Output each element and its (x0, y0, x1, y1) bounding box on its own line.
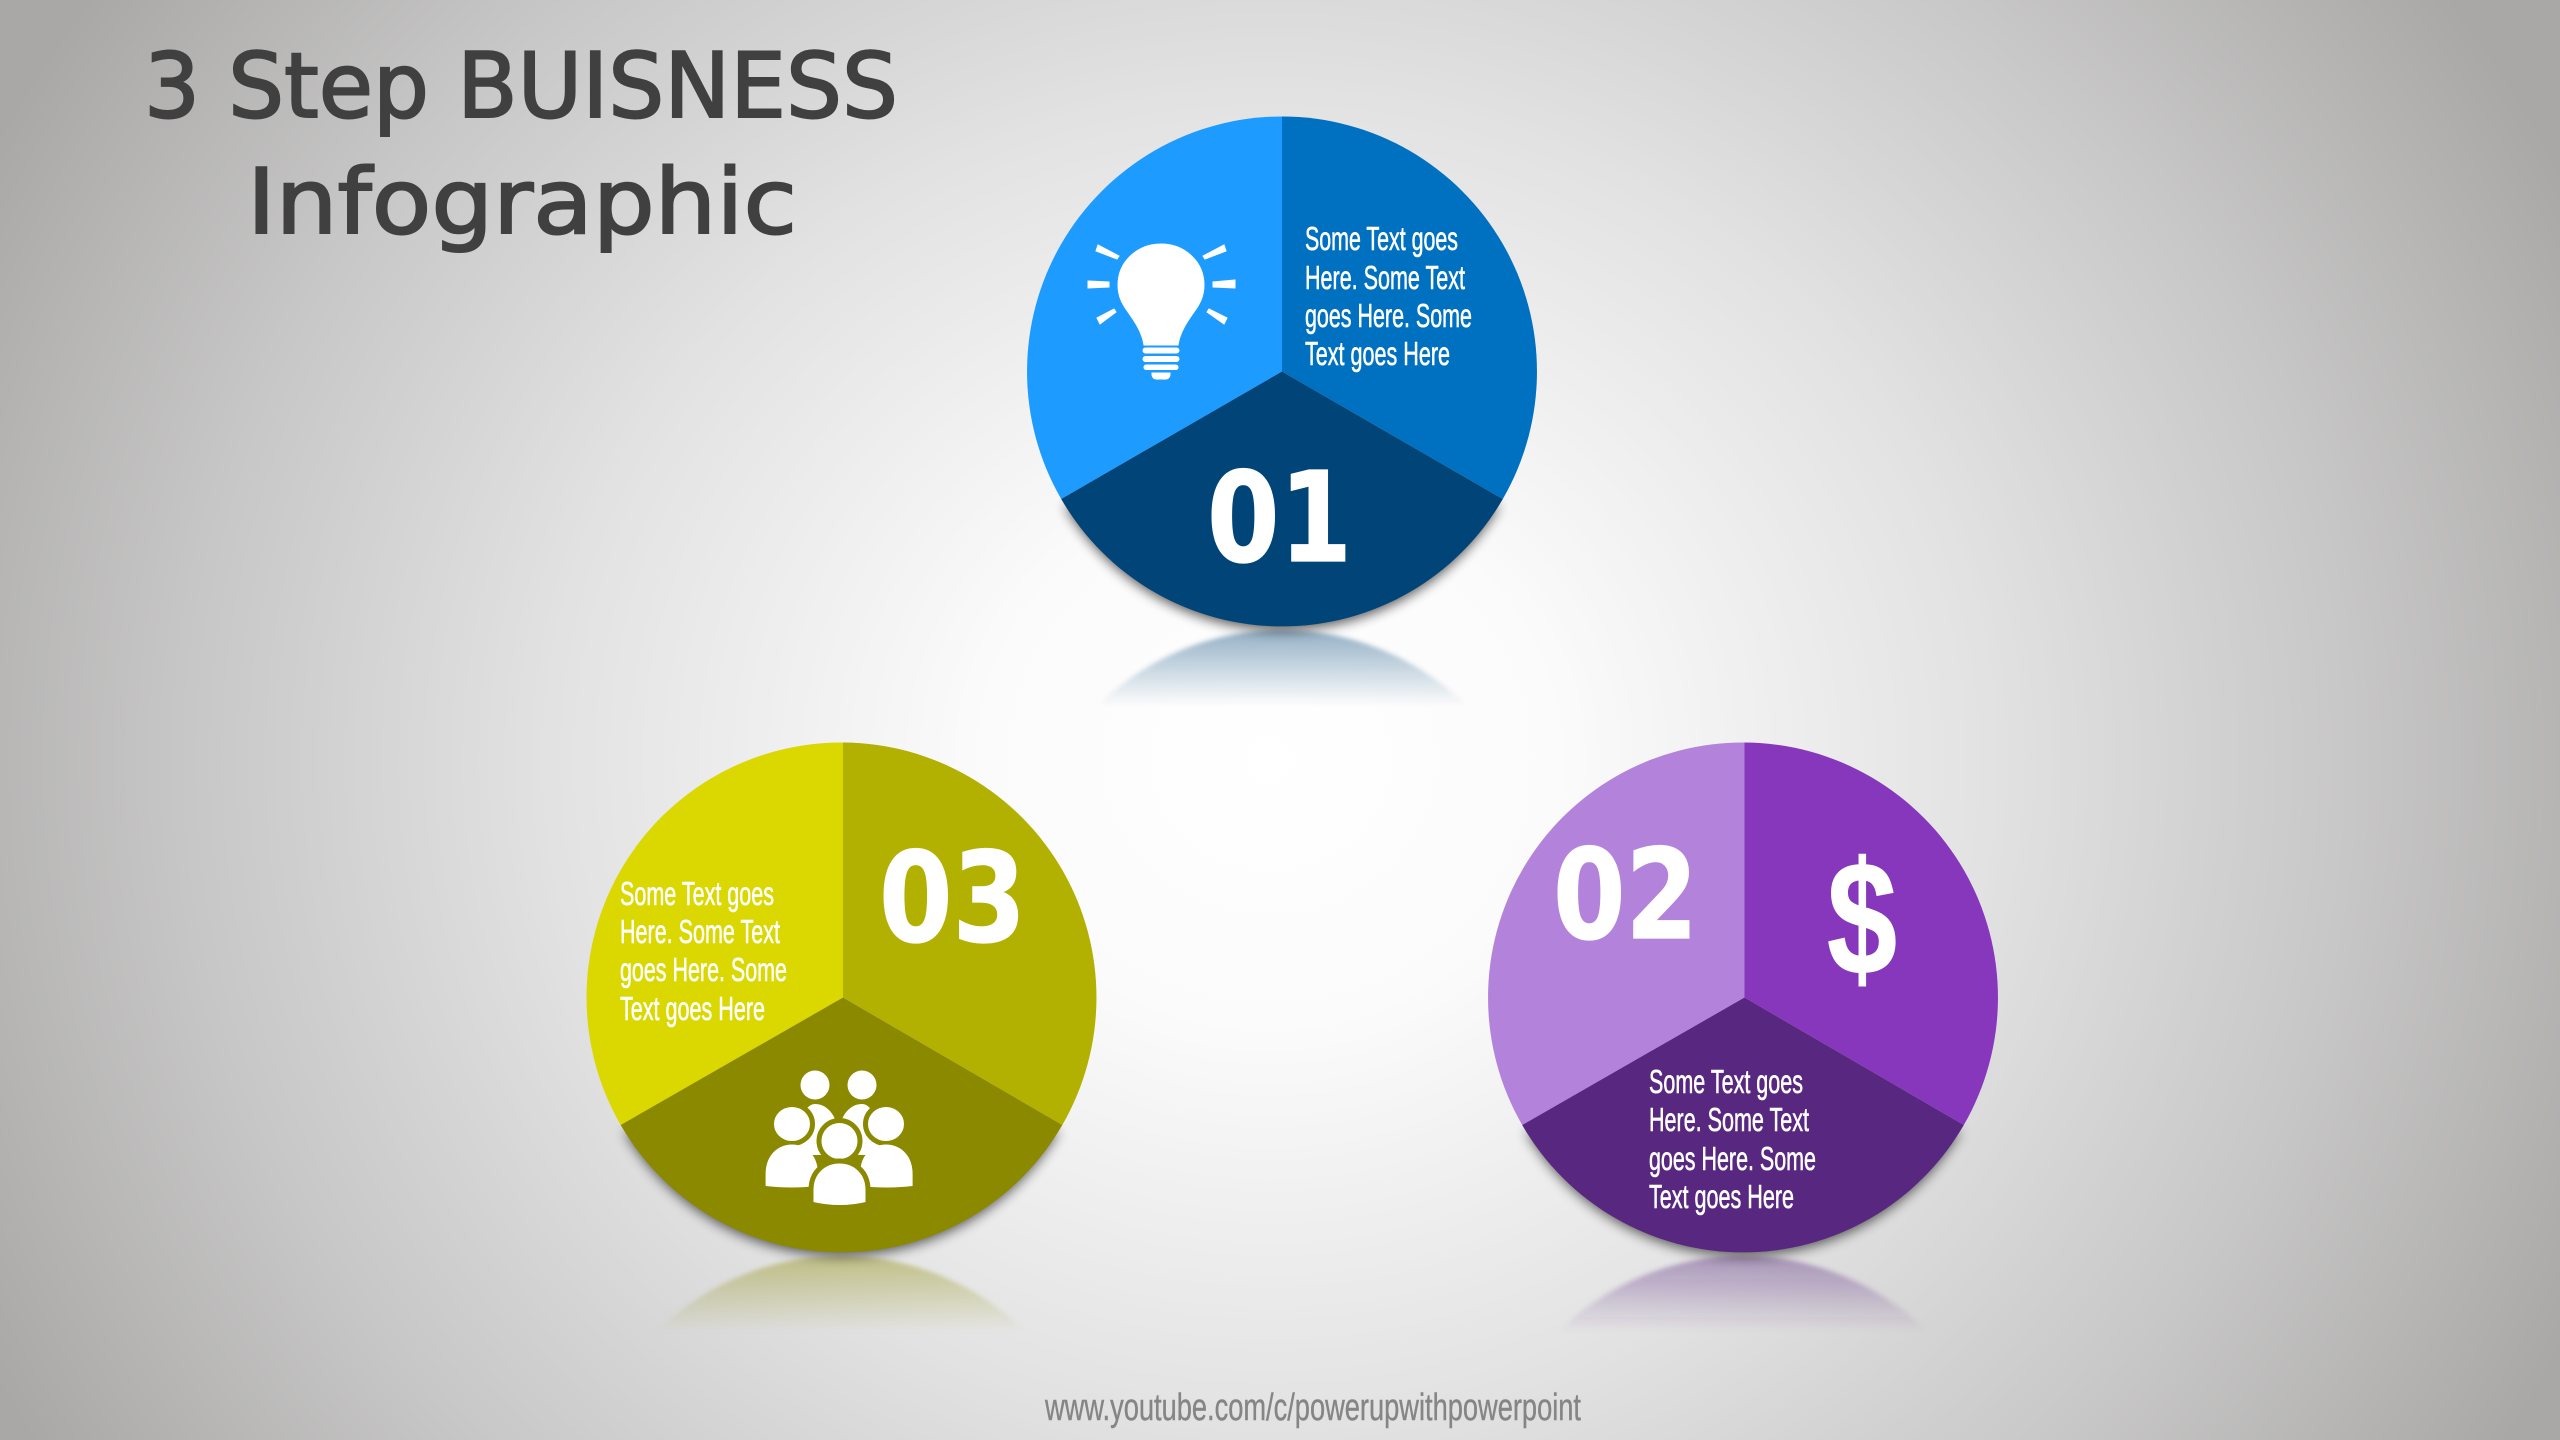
segment: dark olive (621, 998, 1062, 1252)
segment: light blue (1027, 116, 1282, 499)
panel: step 01 circle (1027, 116, 1537, 706)
footer url: www.youtube.com/c/powerupwithpowerpoint (1044, 1387, 1581, 1429)
icon: group of people (766, 1070, 913, 1208)
reflection: step 02 (1558, 1256, 1928, 1332)
segment: dark blue (1061, 372, 1503, 626)
segment: dark purple (1522, 998, 1964, 1252)
title (144, 34, 898, 255)
text: step 01 description: Text goes Here (1305, 335, 1450, 372)
number: 03: 03 (879, 826, 1026, 971)
segment: mid purple (1744, 742, 1998, 1125)
title: Infographic (247, 150, 797, 255)
text: step 02 description: Text goes Here (1649, 1178, 1794, 1215)
text: step 03 description: Here. Some Text (620, 913, 780, 950)
icon: dollar sign: $ (1827, 828, 1897, 1009)
text: step 02 description (1649, 1063, 1816, 1215)
shadow: step 03 (624, 1131, 1059, 1256)
text: step 02 description: Here. Some Text (1649, 1101, 1809, 1138)
text: step 02 description: Some Text goes (1649, 1063, 1803, 1100)
reflection: step 03 (656, 1256, 1026, 1332)
panel: step 03 circle (587, 742, 1096, 1332)
title: 3 Step BUISNESS (144, 34, 898, 139)
text: step 01 description: Some Text goes (1305, 220, 1458, 257)
segment: light purple (1488, 742, 1744, 1125)
shadow: step 01 (1064, 505, 1500, 630)
text: step 03 description: Text goes Here (620, 990, 765, 1027)
shadow: step 02 (1525, 1131, 1961, 1256)
segment: mid blue (1282, 116, 1537, 499)
number: 01: 01 (1207, 446, 1352, 591)
text: step 01 description: goes Here. Some (1305, 297, 1472, 334)
text: step 01 description: Here. Some Text (1305, 259, 1465, 296)
segment: light olive (587, 742, 843, 1125)
reflection: step 01 (1097, 630, 1467, 706)
text: step 03 description: Some Text goes (620, 875, 774, 912)
text: step 03 description (620, 875, 787, 1027)
text: step 02 description: goes Here. Some (1649, 1140, 1816, 1177)
panel: step 02 circle (1488, 742, 1998, 1332)
segment: mid olive (843, 742, 1096, 1125)
text: step 01 description (1305, 220, 1472, 372)
text: step 03 description: goes Here. Some (620, 951, 787, 988)
number: 02: 02 (1553, 823, 1698, 968)
icon: light bulb (1088, 244, 1235, 379)
